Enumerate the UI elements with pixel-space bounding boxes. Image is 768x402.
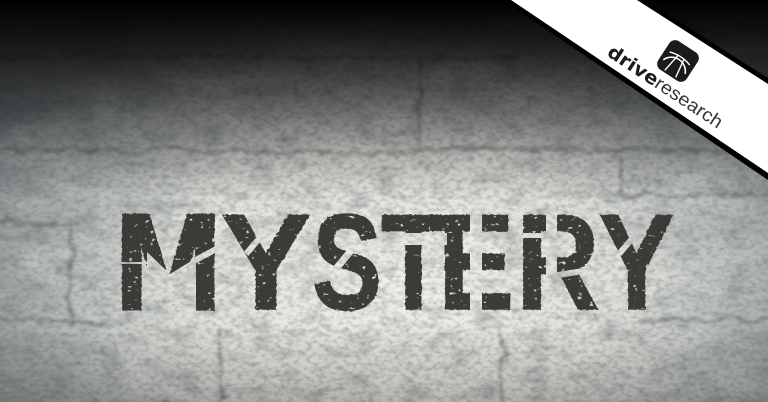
icon: steering wheel (654, 37, 702, 85)
stencilled word: MYSTERY: T (381, 186, 446, 338)
stencilled word: MYSTERY: M (115, 186, 221, 338)
stencilled word: MYSTERY: R (516, 186, 599, 338)
stencilled word: MYSTERY: S (312, 186, 382, 338)
stencilled word: MYSTERY (120, 213, 674, 312)
stencilled word: MYSTERY: Y (599, 187, 674, 338)
stencilled word: MYSTERY: Y (221, 185, 311, 338)
diagonal brand ribbon (503, 0, 768, 180)
brand logo: drive research (603, 37, 727, 133)
wordmark: driveresearch (603, 41, 727, 133)
stencilled word: MYSTERY: E (438, 186, 514, 338)
